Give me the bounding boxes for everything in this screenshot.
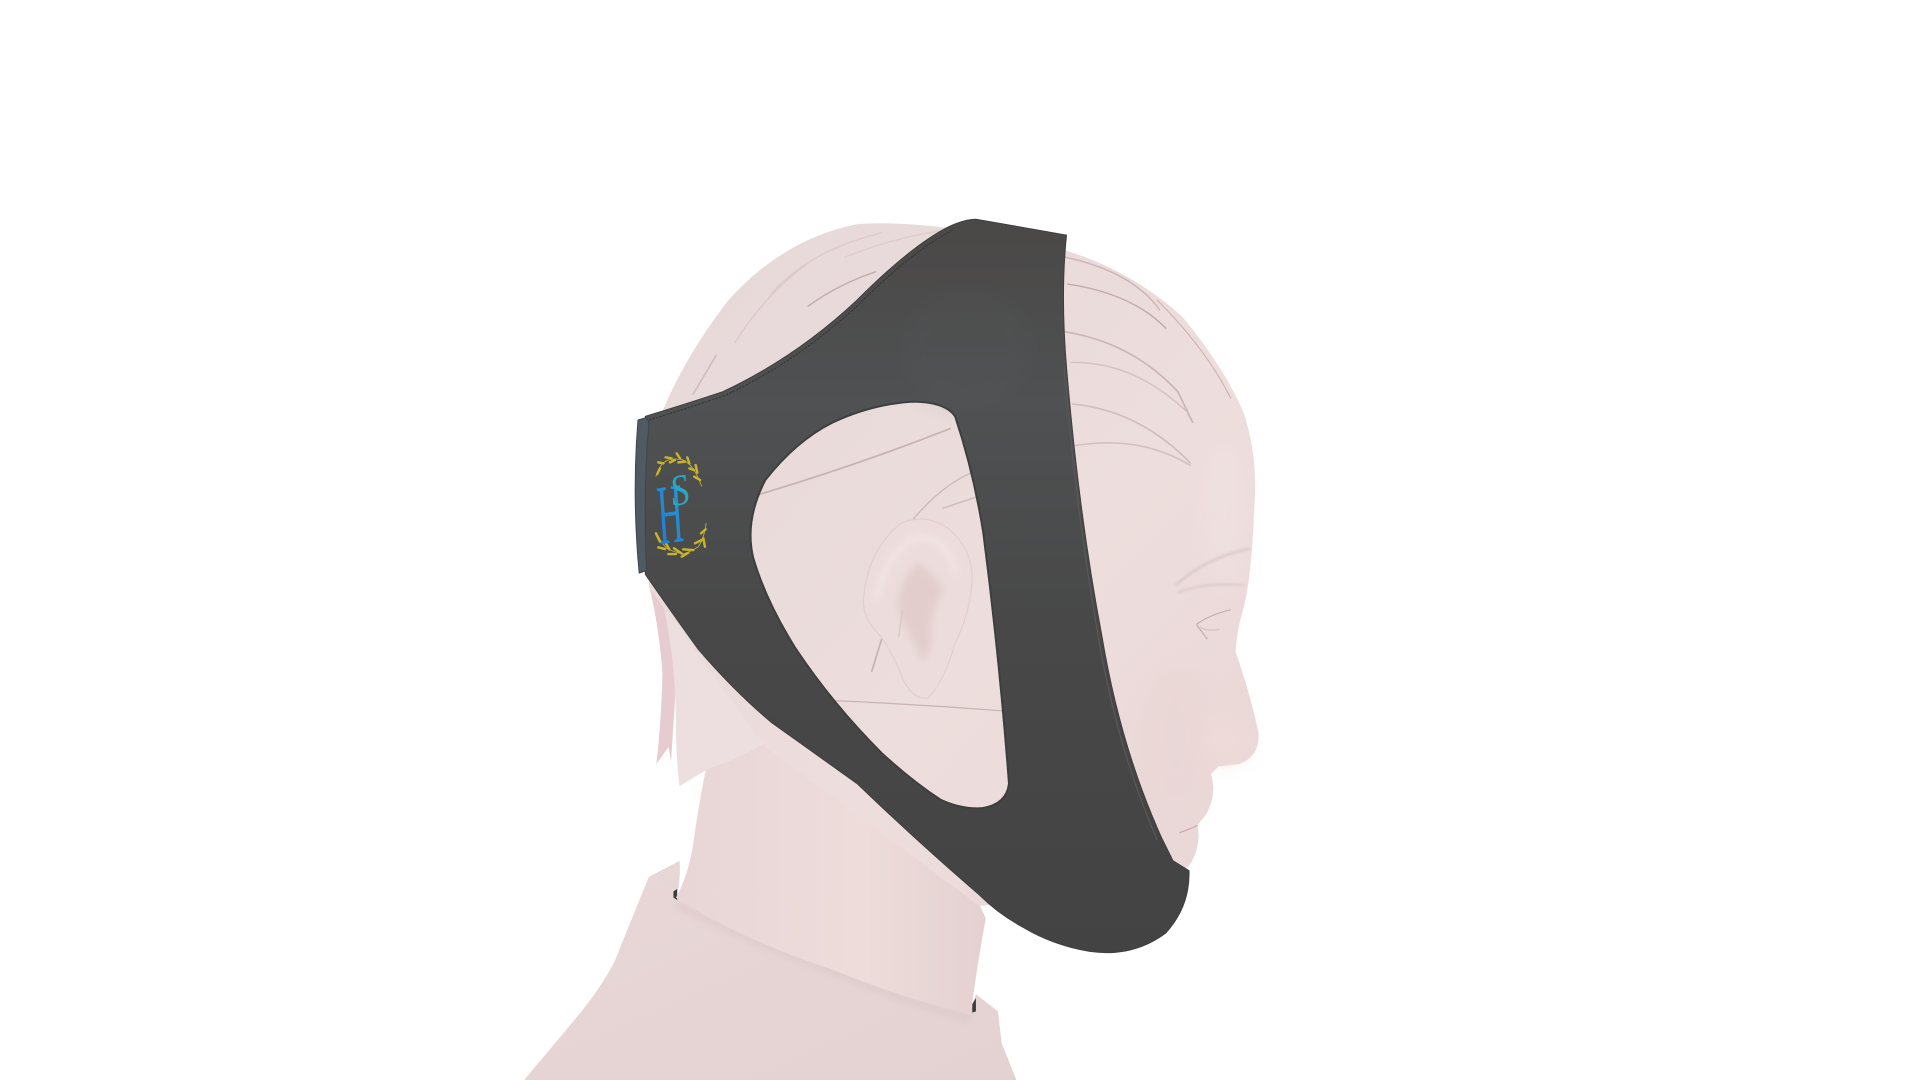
chin strap body — [645, 219, 1189, 953]
strap opening rim — [751, 402, 1009, 808]
neck — [676, 716, 986, 1014]
strap soft highlight — [900, 288, 1035, 410]
logo: laurel wreath and monogram: S — [666, 464, 693, 516]
head — [643, 223, 1259, 906]
bottom laurel — [656, 523, 706, 557]
hair strand lines — [693, 228, 1231, 711]
monogram letters: H — [650, 467, 691, 564]
head shading — [1141, 441, 1249, 802]
rear buckle — [635, 418, 649, 573]
face: eye and brow — [1176, 549, 1250, 833]
logo: laurel wreath and monogram — [650, 453, 706, 564]
top laurel — [656, 453, 702, 486]
strap front edge highlight — [1064, 367, 1157, 840]
shirt and collar — [524, 861, 1016, 1080]
hair strands at the back — [649, 585, 784, 786]
ear — [863, 519, 972, 698]
strap edge stitching — [649, 230, 953, 420]
